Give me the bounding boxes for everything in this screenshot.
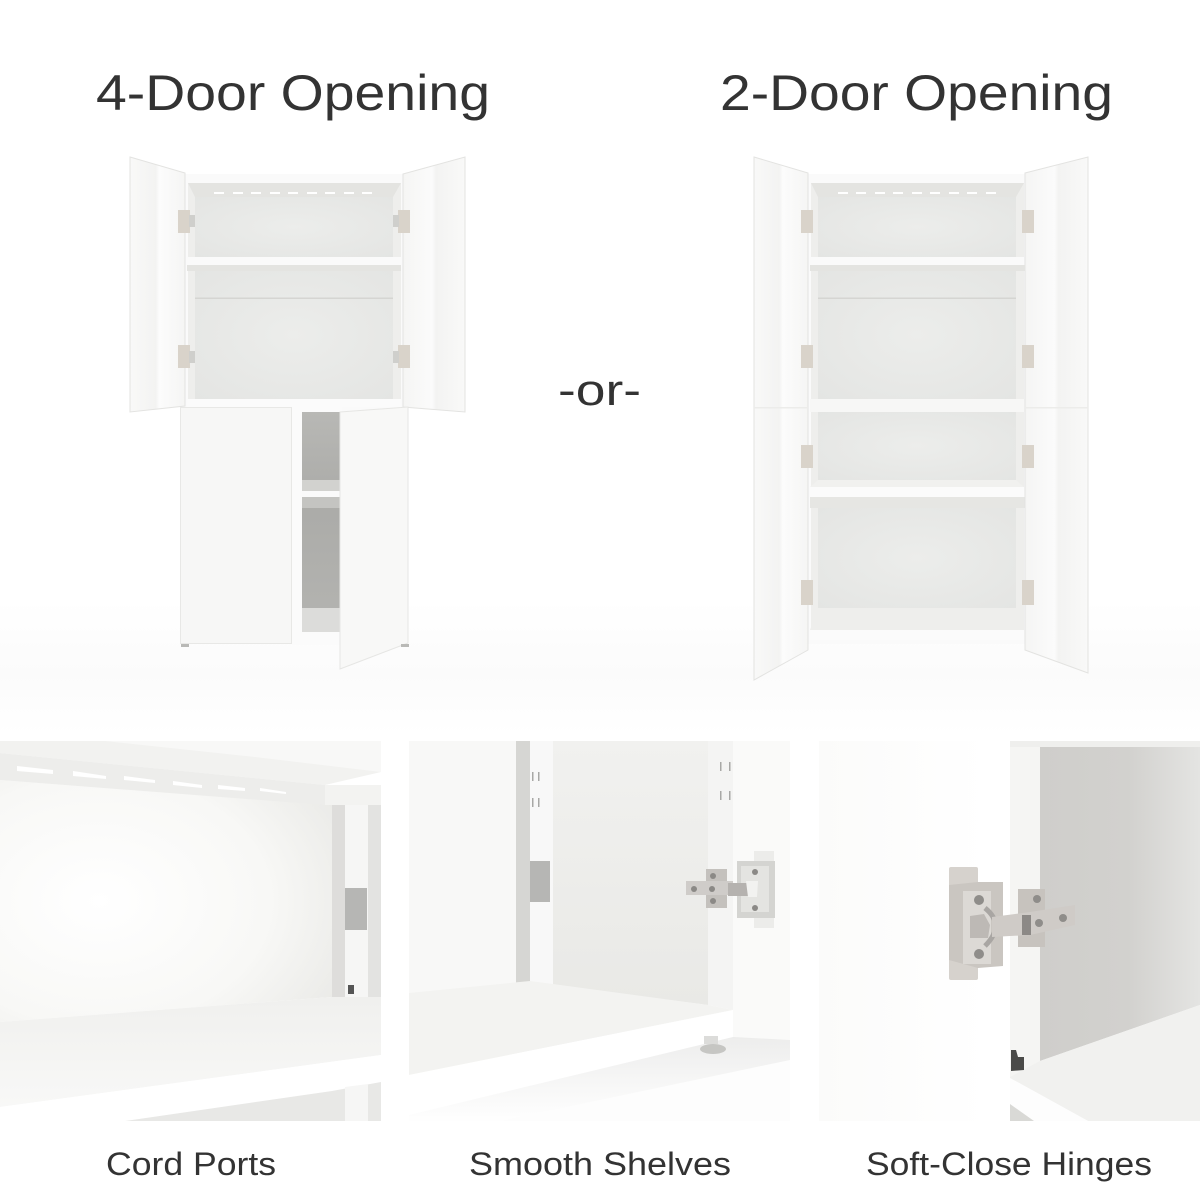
separator text: or: -or- (558, 366, 641, 415)
hinge plate (530, 861, 550, 902)
right upper door (393, 157, 465, 412)
caption: cord ports: Cord Ports (106, 1146, 276, 1182)
side column (332, 805, 381, 998)
lower compartment (125, 1082, 381, 1121)
back wall (553, 741, 708, 1005)
hinge (686, 851, 775, 928)
caption: soft-close hinges: Soft-Close Hinges (866, 1146, 1152, 1182)
upper interior (187, 183, 401, 407)
hinge (949, 867, 1075, 980)
shadow under shelf (409, 1037, 790, 1121)
heading: 2-Door Opening: 2-Door Opening (720, 65, 1113, 121)
photo panel: cord ports (0, 741, 381, 1121)
interior column (1010, 741, 1040, 1081)
photo panel: soft-close hinges (819, 741, 1200, 1121)
back wall (1040, 747, 1200, 1061)
cabinet: 4-door opening (130, 157, 465, 669)
left door (754, 157, 813, 680)
shelf (1010, 1005, 1200, 1121)
carcass (808, 174, 1026, 644)
left wall (409, 741, 516, 996)
door face (819, 741, 988, 1121)
right door (1022, 157, 1088, 673)
back wall (0, 780, 332, 1022)
left upper door (130, 157, 195, 412)
photo panel: smooth shelves (409, 741, 790, 1121)
adjustable foot (700, 1036, 726, 1054)
cable rail (0, 753, 381, 805)
carcass exterior (180, 174, 408, 644)
right column (708, 741, 733, 1010)
interior (810, 183, 1025, 640)
caption: smooth shelves: Smooth Shelves (469, 1146, 731, 1182)
shelf (0, 997, 381, 1107)
right door (733, 741, 790, 1040)
ceiling (0, 741, 381, 785)
heading: 4-Door Opening: 4-Door Opening (96, 65, 490, 121)
lower closed door (180, 408, 292, 644)
shelf slots (532, 762, 730, 807)
floor shading (0, 600, 1200, 735)
shelf clip (1011, 1050, 1024, 1071)
lower open door (340, 407, 408, 669)
lower opening (292, 407, 342, 645)
feet (181, 644, 409, 647)
cabinet: 2-door opening (754, 157, 1088, 680)
shelf front edge (409, 1010, 733, 1115)
shelf top (409, 981, 733, 1075)
